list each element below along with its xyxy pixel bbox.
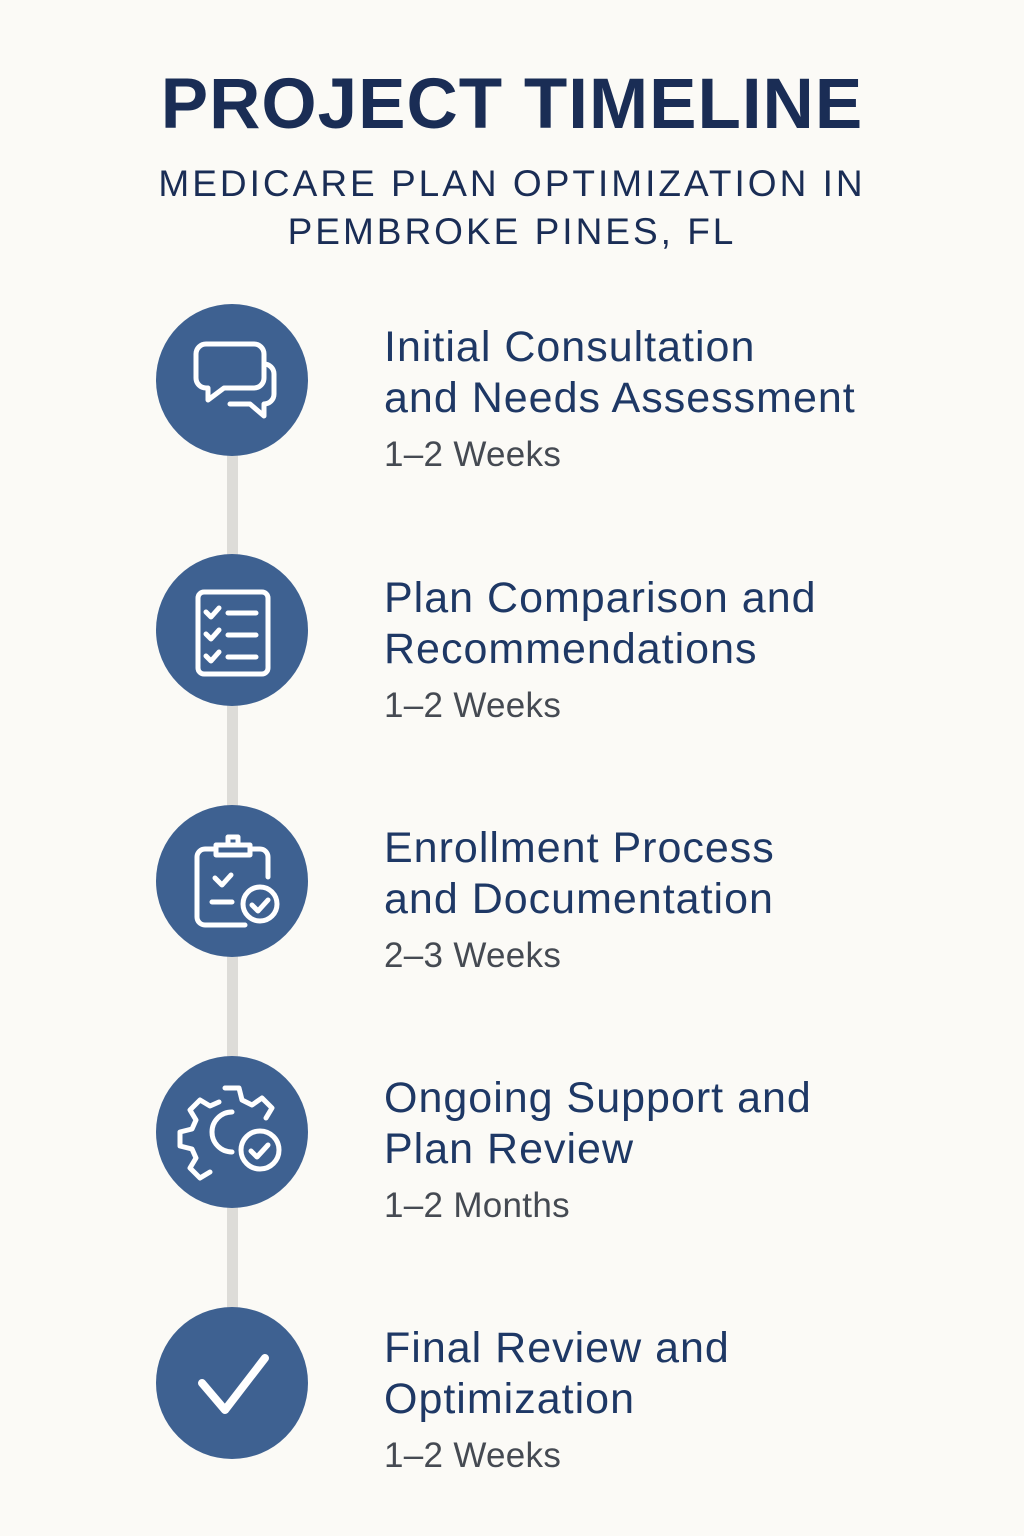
icon: clipboard check (156, 805, 308, 957)
title: PROJECT TIMELINE (161, 65, 863, 144)
step 4 (384, 1074, 812, 1225)
step 3: and Documentation (384, 875, 774, 923)
step 2: Recommendations (384, 625, 758, 673)
step 1: Initial Consultation (384, 323, 755, 371)
subtitle: PEMBROKE PINES, FL (288, 211, 736, 252)
icon: checklist (156, 554, 308, 706)
step 5 (384, 1324, 730, 1475)
step 5: Optimization (384, 1375, 635, 1423)
icon: chat (156, 304, 308, 456)
step 5: Final Review and (384, 1324, 730, 1372)
step 1 (384, 323, 856, 474)
step 5: 1–2 Weeks (384, 1436, 561, 1475)
step 1: 1–2 Weeks (384, 435, 561, 474)
subtitle: MEDICARE PLAN OPTIMIZATION IN (158, 163, 866, 204)
step 4: Plan Review (384, 1125, 634, 1173)
step 3: 2–3 Weeks (384, 936, 561, 975)
subtitle (158, 163, 866, 252)
step 3: Enrollment Process (384, 824, 775, 872)
icon: checkmark (156, 1307, 308, 1459)
step 4: Ongoing Support and (384, 1074, 812, 1122)
step 1: and Needs Assessment (384, 374, 856, 422)
step 2: Plan Comparison and (384, 574, 817, 622)
icon: gear check (156, 1056, 308, 1208)
step 4: 1–2 Months (384, 1186, 570, 1225)
step 2: 1–2 Weeks (384, 686, 561, 725)
step 2 (384, 574, 817, 725)
step 3 (384, 824, 775, 975)
